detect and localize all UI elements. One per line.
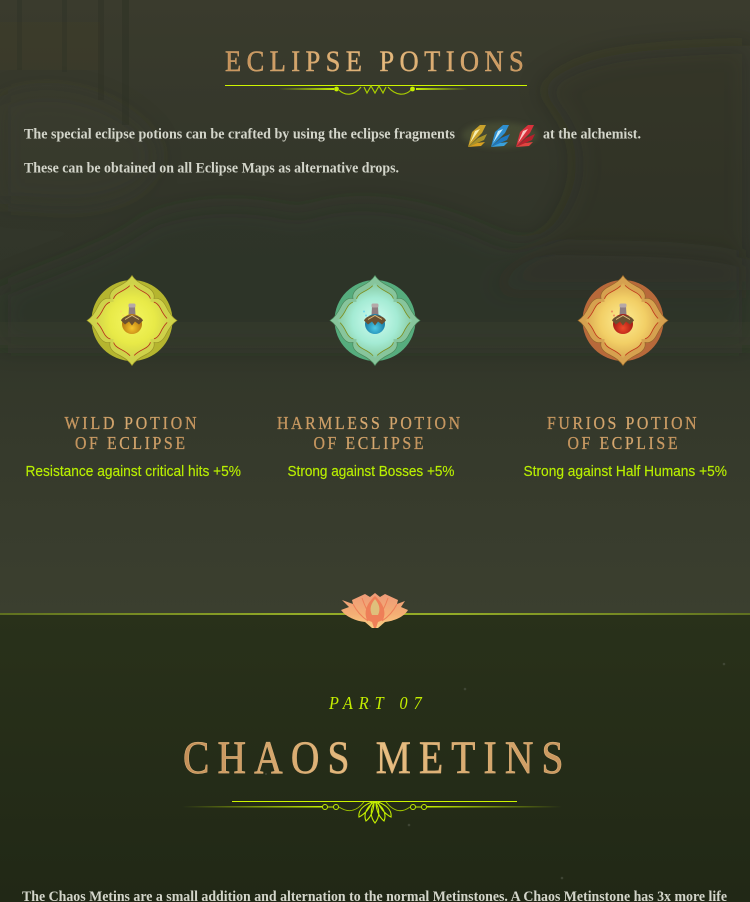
lower section background (0, 614, 750, 902)
heading: Chaos Metins: CHAOS METINS (183, 732, 564, 784)
intro text line 2: These can be obtained on all Eclipse Maps as alternative drops. (24, 160, 399, 176)
icon: harmless potion medallion (330, 276, 420, 366)
icon: furios potion medallion (578, 276, 668, 366)
ornament under chaos metins heading (182, 801, 562, 823)
heading: Eclipse Potions: ECLIPSE POTIONS (225, 46, 524, 78)
label: harmless potion: HARMLESS POTION (277, 413, 460, 433)
upper section background (0, 0, 750, 614)
label: harmless potion: OF ECLIPSE (314, 433, 423, 453)
label: wild potion (26, 413, 241, 480)
label: wild potion: WILD POTION (64, 413, 196, 433)
icons: eclipse fragments (462, 122, 538, 148)
label: harmless potion: Strong against Bosses +5% (288, 464, 455, 480)
label: furios potion: OF ECPLISE (568, 433, 677, 453)
icon: wild potion medallion (87, 276, 177, 366)
label: furios potion: FURIOS POTION (547, 413, 697, 433)
section divider (0, 613, 750, 615)
label: wild potion: Resistance against critical hits +5% (26, 464, 241, 480)
label: wild potion: OF ECLIPSE (75, 433, 185, 453)
part label: PART 07 (328, 693, 423, 713)
intro text line 1 end: at the alchemist. (543, 126, 641, 142)
icon: lotus (341, 593, 408, 628)
label: harmless potion (277, 413, 460, 480)
label: furios potion (524, 413, 727, 480)
label: furios potion: Strong against Half Humans +5% (524, 464, 727, 480)
intro text line 1: The special eclipse potions can be crafted by using the eclipse fragments (24, 126, 455, 142)
ornament under heading (225, 85, 527, 94)
